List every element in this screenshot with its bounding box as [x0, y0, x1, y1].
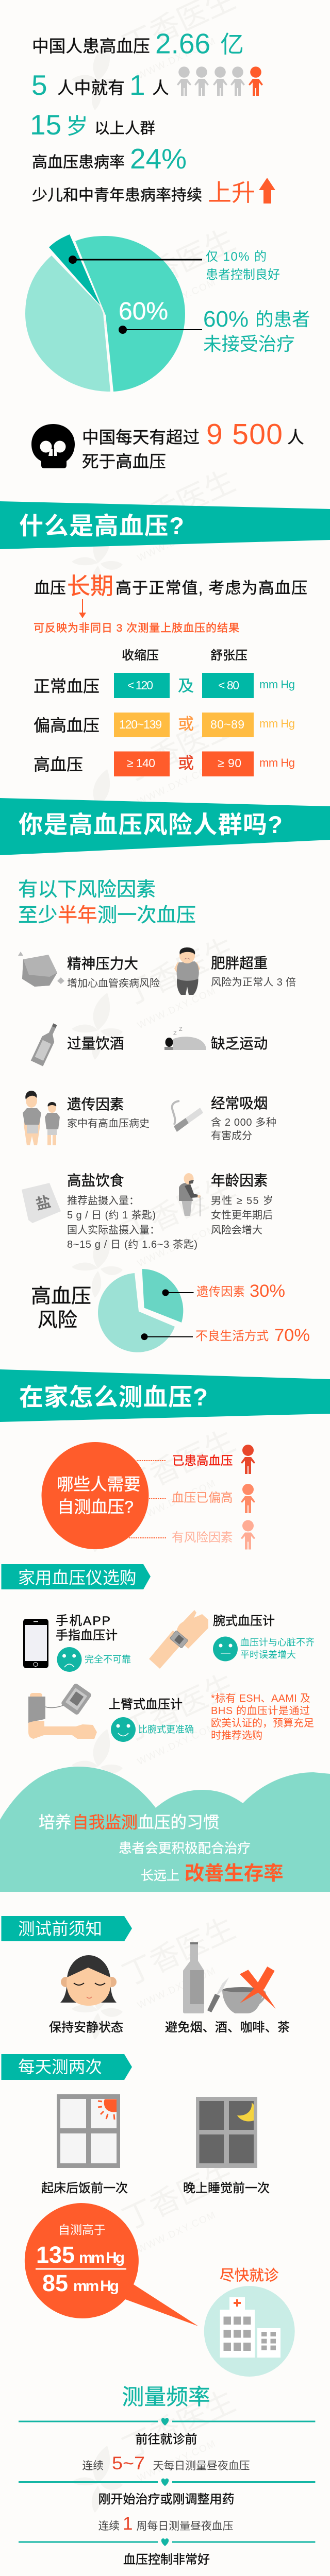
risk factor: stress: 增加心血管疾病风险 [67, 977, 160, 989]
risk factor: age: 风险会增大 [211, 1224, 262, 1236]
heading: measuring at home [0, 1369, 330, 1422]
row: high: 高血压 [34, 755, 83, 774]
tip: stay calm: 保持安静状态 [49, 2021, 123, 2035]
tag: twice a day [1, 2054, 132, 2080]
table: blood pressure ranges: 收缩压 [122, 649, 159, 663]
risk factor: smoking: 含 2 000 多种 [211, 1116, 276, 1128]
text: WWW.DXY.COM [136, 761, 218, 808]
item: starting treatment [98, 2493, 234, 2534]
text: WWW.DXY.COM [136, 1223, 218, 1269]
stat: 2.66 hundred million patients: 中国人患高血压 [32, 37, 150, 56]
arrow: long-term note [79, 599, 86, 618]
icon: phone [23, 1619, 48, 1668]
stat: 2.66 hundred million patients: 亿 [220, 31, 244, 58]
risk factor: smoking: 经常吸烟 [211, 1095, 268, 1111]
stat: one in five people [31, 69, 169, 101]
text: WWW.DXY.COM [136, 36, 218, 82]
band: self-monitoring habit: 自我监测 [72, 1813, 138, 1832]
text: 丁香医生 [118, 1170, 240, 1250]
risk factor: genetics: 家中有高血压病史 [67, 1117, 150, 1129]
stat: prevalence 24%: 24% [130, 143, 187, 175]
device: phone app [23, 1614, 131, 1672]
stat: one in five people: 1 [129, 69, 145, 101]
tag: choosing a home monitor: 家用血压仪选购 [18, 1568, 137, 1587]
risk factor: alcohol [31, 1022, 124, 1066]
stat: one in five people: 5 [31, 69, 47, 101]
item: before a visit [82, 2433, 250, 2473]
icon: wrist and cuff [149, 1610, 208, 1669]
panel: opening statistics [30, 28, 275, 206]
callout: threshold bubble: mm Hg [79, 2249, 125, 2266]
tip: stay calm [49, 1955, 123, 2035]
risk factor: salty diet: 高盐饮食 [67, 1173, 124, 1189]
text: definition: 长期 [67, 573, 113, 599]
tag: choosing a home monitor [1, 1564, 151, 1589]
icon: sleeping person [164, 1026, 206, 1050]
risk factor: genetics [23, 1091, 150, 1145]
stat: age 15 and above: 以上人群 [94, 120, 155, 137]
list: measurement frequency [19, 2418, 315, 2576]
note: certified monitors: 时推荐选购 [211, 1730, 262, 1741]
band: self-monitoring habit: 培养 [39, 1813, 71, 1832]
text: 丁香医生 [118, 223, 240, 304]
table: blood pressure ranges: 舒张压 [210, 649, 248, 663]
callout: lifestyle 70%: 70% [274, 1326, 310, 1345]
note: certified monitors: 欧美认证的，预算充足 [211, 1717, 314, 1729]
group: elevated pressure: 血压已偏高 [172, 1491, 233, 1505]
60% callout: 60% [203, 307, 249, 332]
text: daily deaths: 人 [287, 428, 304, 447]
risk factor: salty diet: 国人实际盐摄入量： [67, 1224, 160, 1236]
stat: youth prevalence rising [32, 178, 275, 206]
icon: skull [31, 424, 75, 468]
risk factor: obesity: 肥胖超重 [211, 955, 268, 971]
text: 丁香医生 [118, 1424, 240, 1505]
item: before a visit: 连续 [82, 2460, 104, 2472]
note: certified monitors: BHS 的血压计是通过 [211, 1705, 310, 1717]
risk factor: salty diet [22, 1173, 197, 1250]
risk factor: obesity [174, 947, 296, 995]
group: elevated pressure [149, 1484, 255, 1513]
text: daily deaths: 中国每天有超过 [82, 428, 200, 447]
risk factor: age: 女性更年期后 [211, 1209, 273, 1221]
text: 丁香医生 [118, 2384, 240, 2465]
text: WWW.DXY.COM [136, 518, 218, 564]
icon: night window [196, 2097, 257, 2168]
icon: salt bag: 盐 [34, 1193, 53, 1213]
heading: what is hypertension [0, 501, 330, 549]
item: well controlled [62, 2553, 285, 2576]
subheading: measure every half year: 半年 [58, 904, 97, 926]
chart: treatment pie [25, 234, 310, 392]
icon: stress rock [18, 952, 64, 987]
risk factor: smoking: 有害成分 [211, 1130, 252, 1142]
text: daily deaths: 死于高血压 [82, 452, 166, 471]
band: self-monitoring habit: 改善生存率 [185, 1862, 284, 1885]
60% callout: 的患者 [255, 309, 310, 330]
risk factor: stress: 精神压力大 [67, 956, 138, 972]
device: phone app: 完全不可靠 [85, 1654, 131, 1665]
risk factor: stress [18, 952, 160, 989]
heading: what is hypertension: 什么是高血压? [19, 512, 184, 539]
item: starting treatment: 周每日测量昼夜血压 [136, 2520, 234, 2532]
subheading: measure every half year [18, 878, 196, 926]
10% callout: 患者控制良好 [206, 268, 280, 282]
item: starting treatment: 连续 [98, 2520, 120, 2532]
tip: avoid stimulants [165, 1942, 290, 2035]
device: upper arm monitor [28, 1683, 194, 1742]
row: high [34, 751, 295, 776]
band: self-monitoring habit: 患者会更积极配合治疗 [119, 1841, 251, 1856]
callout: lifestyle 70%: 不良生活方式 [195, 1329, 269, 1343]
callout: genetics 30% [162, 1281, 285, 1301]
stat: one in five people: 人 [152, 78, 169, 97]
note: certified monitors: *标有 ESH、AAMI 及 [211, 1692, 310, 1704]
row: normal: < 80 [218, 679, 239, 692]
icon: sleeping person: Z [179, 1026, 183, 1032]
tag: before measuring [1, 1916, 132, 1941]
note: certified monitors [211, 1692, 314, 1741]
text: 丁香医生 [118, 1668, 240, 1749]
callout: see a doctor [204, 2267, 295, 2377]
callout: threshold bubble: 自测高于 [58, 2223, 106, 2236]
risk factor: salty diet: 8~15 g / 日 (约 1.6~3 茶匙) [67, 1239, 197, 1250]
band: self-monitoring habit: 长远上 [141, 1869, 179, 1883]
row: elevated: mm Hg [259, 717, 295, 730]
60% callout [119, 307, 310, 354]
icon: elderly man with cane [179, 1173, 201, 1216]
callout: threshold bubble: 135 [36, 2242, 75, 2268]
text: WWW.DXY.COM [136, 1721, 218, 1768]
text: 丁香医生 [118, 1911, 240, 1992]
device: wrist monitor: 平时误差增大 [240, 1650, 296, 1660]
risk factor: alcohol: 过量饮酒 [67, 1036, 124, 1052]
row: normal: < 120 [127, 679, 153, 692]
icon: sleeping person: Z [173, 1030, 177, 1037]
icon: hospital [204, 2286, 295, 2377]
icon: salt bag [22, 1183, 61, 1223]
row: elevated [34, 713, 295, 737]
row: normal [34, 673, 295, 698]
10% callout: 仅 10% 的 [206, 250, 267, 264]
group: already hypertensive: 已患高血压 [172, 1454, 233, 1467]
text: 丁香医生 [118, 2156, 240, 2236]
stat: age 15 and above [30, 109, 155, 141]
chart: hypertension risk pie: 高血压 [31, 1285, 91, 1308]
risk factor: smoking [172, 1095, 276, 1142]
risk factor: obesity: 风险为正常人 3 倍 [211, 976, 296, 988]
text: after waking: 起床后饭前一次 [41, 2181, 128, 2195]
60% label in pie: 60% [119, 298, 168, 325]
icon: cigarette with smoke [172, 1101, 203, 1132]
text: 丁香医生 [118, 708, 240, 789]
callout: lifestyle 70% [141, 1326, 310, 1345]
tip: avoid stimulants: 避免烟、酒、咖啡、茶 [165, 2021, 290, 2035]
heading: measurement frequency: 测量频率 [122, 2385, 210, 2410]
callout: threshold bubble: mm Hg [73, 2278, 119, 2295]
diagram: who should self-measure [41, 1442, 255, 1550]
band: self-monitoring habit: 血压的习惯 [138, 1813, 219, 1832]
group: risk factors [129, 1520, 255, 1550]
tag: before measuring: 测试前须知 [18, 1919, 102, 1938]
icon: morning window [57, 2094, 120, 2168]
heading: are you at risk [0, 798, 330, 855]
icon: bottle, cigarette, cup [183, 1942, 276, 2013]
row: high: ≥ 140 [127, 756, 155, 770]
icon: wine bottle [31, 1022, 61, 1066]
stat: one in five people: 人中就有 [57, 78, 125, 97]
item: well controlled: 血压控制非常好 [123, 2553, 210, 2567]
text: definition [34, 573, 307, 634]
row: normal: 及 [178, 677, 194, 695]
row: elevated: 或 [178, 715, 194, 733]
row: normal: mm Hg [259, 678, 295, 691]
text: daily deaths: 9 500 [206, 418, 283, 451]
device: wrist monitor [149, 1610, 315, 1669]
subheading: measure every half year: 有以下风险因素 [18, 878, 156, 901]
text: 丁香医生 [118, 931, 240, 1012]
text: WWW.DXY.COM [136, 277, 218, 323]
chart: hypertension risk pie [31, 1269, 310, 1352]
callout: threshold bubble: 85 [42, 2270, 68, 2296]
text: WWW.DXY.COM [136, 985, 218, 1031]
stat: 2.66 hundred million patients: 2.66 [155, 28, 210, 60]
group: risk factors: 有风险因素 [172, 1531, 233, 1545]
risk factor: age: 年龄因素 [211, 1173, 268, 1189]
row: elevated: 80~89 [210, 718, 244, 731]
callout: threshold bubble [25, 2203, 199, 2326]
stat: prevalence 24% [32, 143, 187, 175]
band: self-monitoring habit [0, 1767, 330, 1892]
item: before a visit: 5~7 [112, 2453, 145, 2473]
risk factor: salty diet: 推荐盐摄入量： [67, 1195, 139, 1207]
risk factor: salty diet: 5 g / 日 (约 1 茶匙) [67, 1209, 156, 1221]
icon: neutral face [213, 1636, 238, 1661]
row: elevated: 偏高血压 [34, 716, 100, 735]
icon: five people, one highlighted [177, 66, 263, 96]
stat: youth prevalence rising: 上升 [208, 179, 255, 206]
item: starting treatment: 刚开始治疗或刚调整用药 [98, 2493, 234, 2506]
risk factor: age: 男性 ≥ 55 岁 [211, 1195, 273, 1207]
device: phone app: 手指血压计 [56, 1629, 118, 1642]
icon: arm and cuff [28, 1683, 97, 1739]
row: elevated: 120~139 [119, 718, 162, 731]
tag: twice a day: 每天测两次 [18, 2057, 102, 2076]
text: definition: 血压 [34, 579, 66, 597]
text: WWW.DXY.COM [136, 1965, 218, 2011]
10% callout [69, 250, 280, 282]
icon: parent and child [23, 1091, 60, 1145]
text: daily deaths [82, 418, 304, 471]
heading: measuring at home: 在家怎么测血压? [19, 1383, 208, 1411]
text: 丁香医生 [118, 464, 240, 545]
text: definition: 可反映为非同日 3 次测量上肢血压的结果 [34, 622, 239, 634]
risk factor: age [179, 1173, 273, 1236]
device: upper arm monitor: 比腕式更准确 [138, 1724, 194, 1735]
text: definition: 高于正常值, 考虑为高血压 [116, 579, 307, 597]
item: before a visit: 前往就诊前 [135, 2433, 197, 2446]
stat: prevalence 24%: 高血压患病率 [32, 154, 125, 171]
callout: genetics 30%: 30% [250, 1281, 285, 1301]
text: WWW.DXY.COM [136, 2438, 218, 2484]
diagram: who should self-measure: 自测血压? [57, 1498, 134, 1516]
row: high: mm Hg [259, 756, 295, 769]
device: phone app: 手机APP [56, 1614, 110, 1628]
group: already hypertensive [137, 1445, 255, 1474]
device: wrist monitor: 血压计与心脏不齐 [240, 1637, 315, 1648]
item: starting treatment: 1 [123, 2514, 133, 2534]
device: upper arm monitor: 上臂式血压计 [108, 1698, 183, 1711]
icon: overweight man [174, 947, 200, 995]
stat: age 15 and above: 15 [30, 109, 61, 141]
icon: calm woman [60, 1955, 117, 2006]
text: before bed: 晚上睡觉前一次 [183, 2181, 270, 2195]
stat: youth prevalence rising: 少儿和中青年患病率持续 [32, 187, 202, 204]
heading: are you at risk: 你是高血压风险人群吗? [19, 811, 283, 838]
callout: see a doctor: 尽快就诊 [220, 2267, 279, 2284]
risk factor: genetics: 遗传因素 [67, 1096, 124, 1112]
table: blood pressure ranges [34, 649, 295, 776]
device: wrist monitor: 腕式血压计 [213, 1614, 275, 1628]
60% callout: 未接受治疗 [203, 334, 295, 354]
icon: sad face [57, 1647, 81, 1672]
stat: 2.66 hundred million patients [32, 28, 244, 60]
item: before a visit: 天每日测量昼夜血压 [153, 2460, 250, 2472]
stat: age 15 and above: 岁 [66, 114, 88, 139]
callout: genetics 30%: 遗传因素 [196, 1285, 245, 1298]
chart: hypertension risk pie: 风险 [38, 1309, 77, 1331]
row: normal: 正常血压 [34, 677, 100, 696]
row: high: 或 [178, 754, 194, 772]
icon: happy face [111, 1717, 136, 1742]
text: WWW.DXY.COM [136, 1478, 218, 1524]
row: high: ≥ 90 [218, 756, 241, 770]
subheading: measure every half year: 测一次血压 [97, 904, 196, 926]
text: WWW.DXY.COM [136, 2209, 218, 2256]
subheading: measure every half year: 至少 [18, 904, 57, 926]
risk factor: no exercise: 缺乏运动 [211, 1036, 268, 1052]
diagram: who should self-measure: 哪些人需要 [57, 1475, 141, 1494]
risk factor: no exercise [164, 1026, 268, 1052]
